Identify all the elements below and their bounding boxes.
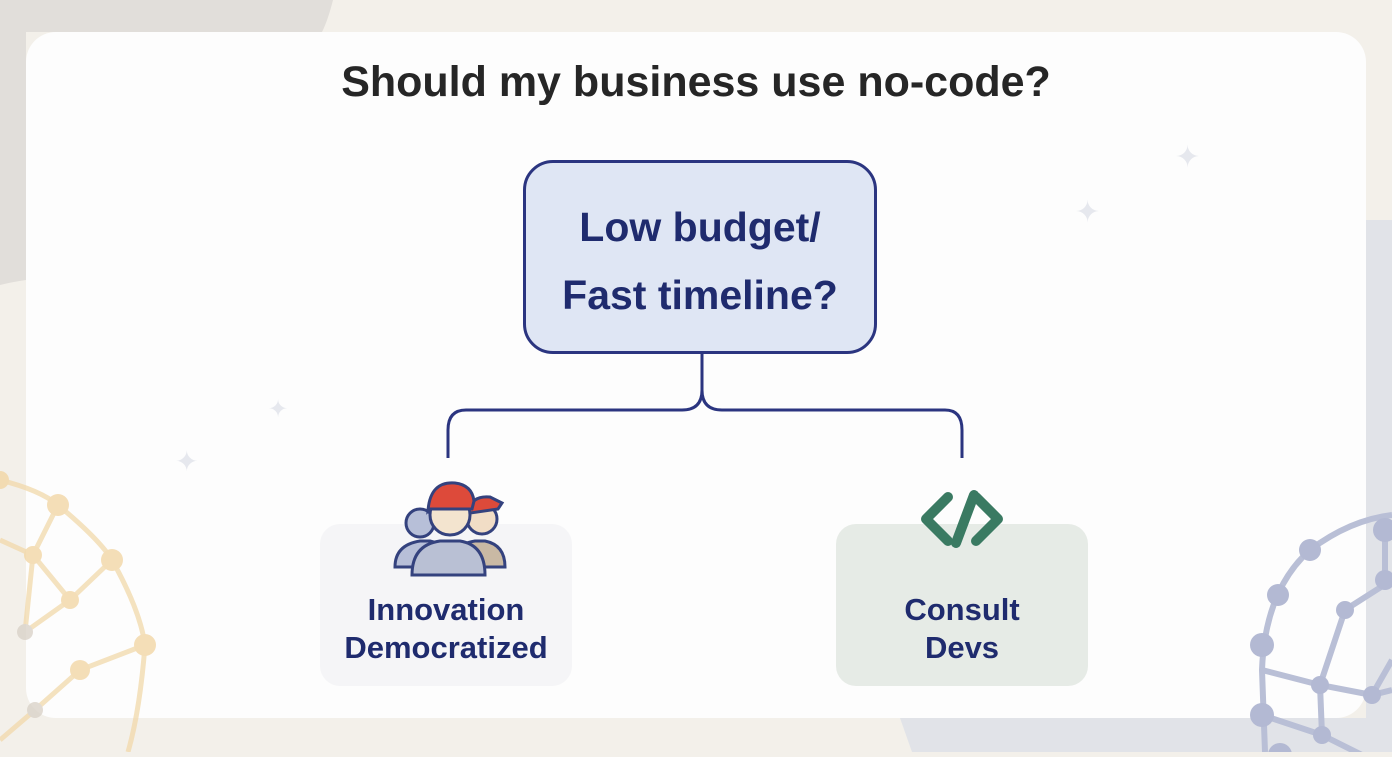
title: Should my business use no-code? xyxy=(341,58,1051,106)
sparkles: ✦ xyxy=(1175,141,1200,174)
decision box xyxy=(523,160,877,354)
connector arrows xyxy=(446,354,964,458)
decision box: Low budget/ xyxy=(579,204,821,250)
label: Innovation xyxy=(368,592,524,627)
network decoration right xyxy=(1250,512,1392,752)
option left: Innovation Democratized xyxy=(344,481,548,665)
decision box: Fast timeline? xyxy=(562,272,838,318)
label: Consult xyxy=(904,592,1020,627)
option right: Consult Devs xyxy=(836,490,1088,686)
label xyxy=(904,592,1020,665)
icon: people group xyxy=(394,481,506,576)
network decoration left xyxy=(0,471,156,752)
sparkles: ✦ xyxy=(175,446,198,477)
label: Democratized xyxy=(344,630,548,665)
sparkles: ✦ xyxy=(268,396,288,423)
sparkles: ✦ xyxy=(1075,196,1100,229)
label: Devs xyxy=(925,630,999,665)
sparkles xyxy=(175,141,1200,477)
label xyxy=(344,592,548,665)
icon: code brackets xyxy=(921,490,1003,548)
